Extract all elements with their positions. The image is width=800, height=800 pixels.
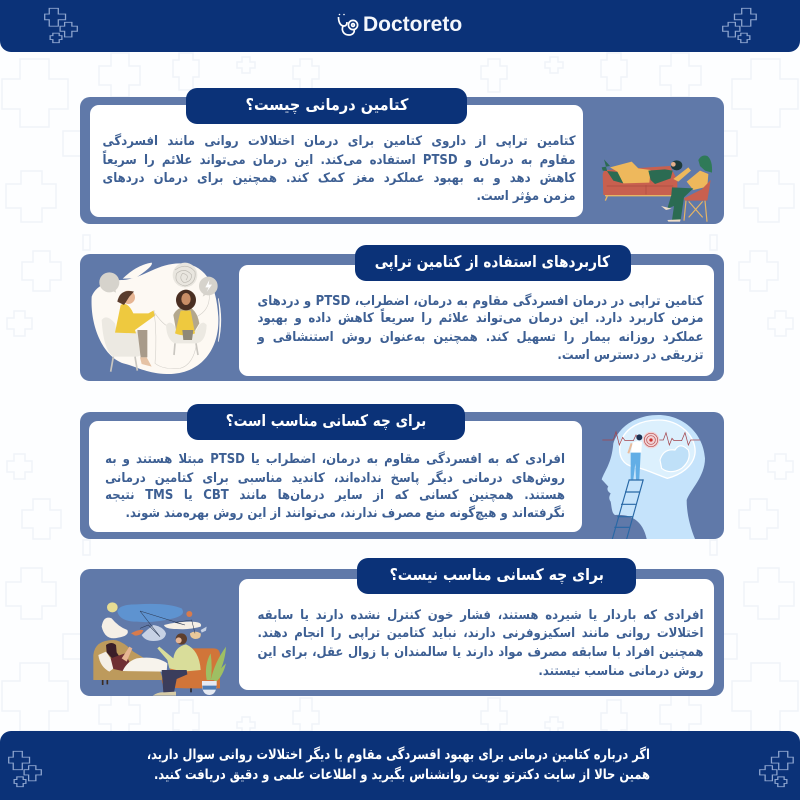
text: who is it not suitable for: [257, 608, 703, 679]
panel: what is ketamine therapy: [80, 97, 724, 224]
heading: who is it not suitable for: برای چه کسانی مناسب نیست؟: [389, 565, 604, 584]
footer bar: [0, 731, 800, 800]
text: who is it not suitable for: روش درمانی مناسب نیستند.: [538, 664, 703, 679]
text: who is it suitable for: افرادی که به افسردگی مقاوم به درمان، اضطراب یا PTSD مبتلا هستند و به: [105, 452, 565, 467]
text: who is it not suitable for: افرادی که باردار یا شیرده هستند، فشار خون کنترل نشده دارند یا سابقه: [257, 608, 703, 623]
illustration: counselling session: [92, 262, 222, 374]
heading: what is ketamine therapy: [186, 88, 467, 124]
panel: who is it suitable for: [80, 412, 724, 539]
illustration: head with brain and ladder: [602, 415, 705, 539]
text: uses of ketamine therapy: تزریقی در دسترس است.: [557, 348, 703, 363]
callout text: اگر درباره کتامین درمانی برای بهبود افسردگی مقاوم یا دیگر اختلالات روانی سوال دارید،: [147, 747, 650, 763]
body card: [89, 421, 582, 532]
text: uses of ketamine therapy: [257, 293, 704, 363]
panel: who is it not suitable for: [80, 569, 724, 696]
text: what is ketamine therapy: مقاوم به درمان و PTSD استفاده می‌کند. این درمان می‌تواند علائم را سریعاً: [102, 153, 575, 168]
heading: uses of ketamine therapy: کاربردهای استفاده از کتامین تراپی: [375, 252, 610, 271]
heading: who is it not suitable for: [357, 558, 636, 594]
brand name: Doctoreto: [363, 13, 462, 36]
icon: crosses right: [722, 8, 757, 44]
text: who is it suitable for: روش‌های درمانی دیگر پاسخ نداده‌اند، کاندید مناسبی برای کتامین درمانی: [105, 471, 565, 486]
heading: uses of ketamine therapy: [355, 245, 631, 281]
text: what is ketamine therapy: [102, 133, 576, 204]
text: uses of ketamine therapy: کتامین تراپی در درمان افسردگی مقاوم به درمان، اضطراب، PTSD و دردهای: [257, 294, 703, 309]
callout text: [147, 746, 650, 783]
heading: what is ketamine therapy: کتامین درمانی چیست؟: [245, 95, 408, 114]
text: who is it suitable for: هستند. همچنین کسانی که از سایر درمان‌ها مانند CBT یا TMS نتیجه: [105, 488, 565, 503]
text: what is ketamine therapy: مزمن مؤثر است.: [476, 189, 575, 204]
icon: crosses right: [759, 750, 794, 788]
text: what is ketamine therapy: کتامین تراپی از داروی کتامین برای درمان اختلالات روانی مانند افسردگی: [102, 134, 575, 149]
text: who is it not suitable for: همچنین افراد با سابقه مصرف مواد دارند یا سالمندان با زوال عقل، برای این: [257, 645, 703, 660]
text: uses of ketamine therapy: عملکرد روزانه بیمار را تسهیل کند. همچنین به‌عنوان روش استنشاقی و: [257, 330, 703, 345]
panel: uses of ketamine therapy: [80, 254, 724, 381]
illustration: therapy couch: [602, 156, 712, 222]
text: what is ketamine therapy: کاهش دهد و به بهبود عملکرد مغز کمک کند. همچنین برای درمان دردهای: [102, 171, 575, 186]
heading: who is it suitable for: [187, 404, 465, 440]
icon: stethoscope: [338, 14, 358, 36]
text: who is it not suitable for: اختلالات روانی مانند اسکیزوفرنی دارند، نباید کتامین تراپی را انجام دهند.: [257, 626, 703, 641]
callout text: همین حالا از سایت دکترتو نوبت روانشناس بگیرید و اطلاعات علمی و دقیق دریافت کنید.: [154, 767, 650, 783]
header bar: [0, 0, 800, 52]
heading: who is it suitable for: برای چه کسانی مناسب است؟: [226, 411, 426, 430]
icon: crosses left: [8, 750, 42, 788]
body card: [239, 579, 714, 690]
logo: [338, 13, 462, 36]
text: who is it suitable for: نگرفته‌اند و هیچ‌گونه منع مصرف ندارند، می‌توانند از این روش بهره‌مند شوند.: [126, 506, 565, 521]
body card: [90, 105, 583, 217]
text: uses of ketamine therapy: مزمن کاربرد دارد. این درمان می‌تواند علائم را سریعاً کاهش داده و بهبود: [257, 311, 703, 326]
icon: crosses left: [44, 8, 78, 44]
illustration: patient on couch with therapist: [93, 602, 226, 696]
text: who is it suitable for: [105, 451, 565, 521]
body card: [239, 265, 714, 376]
